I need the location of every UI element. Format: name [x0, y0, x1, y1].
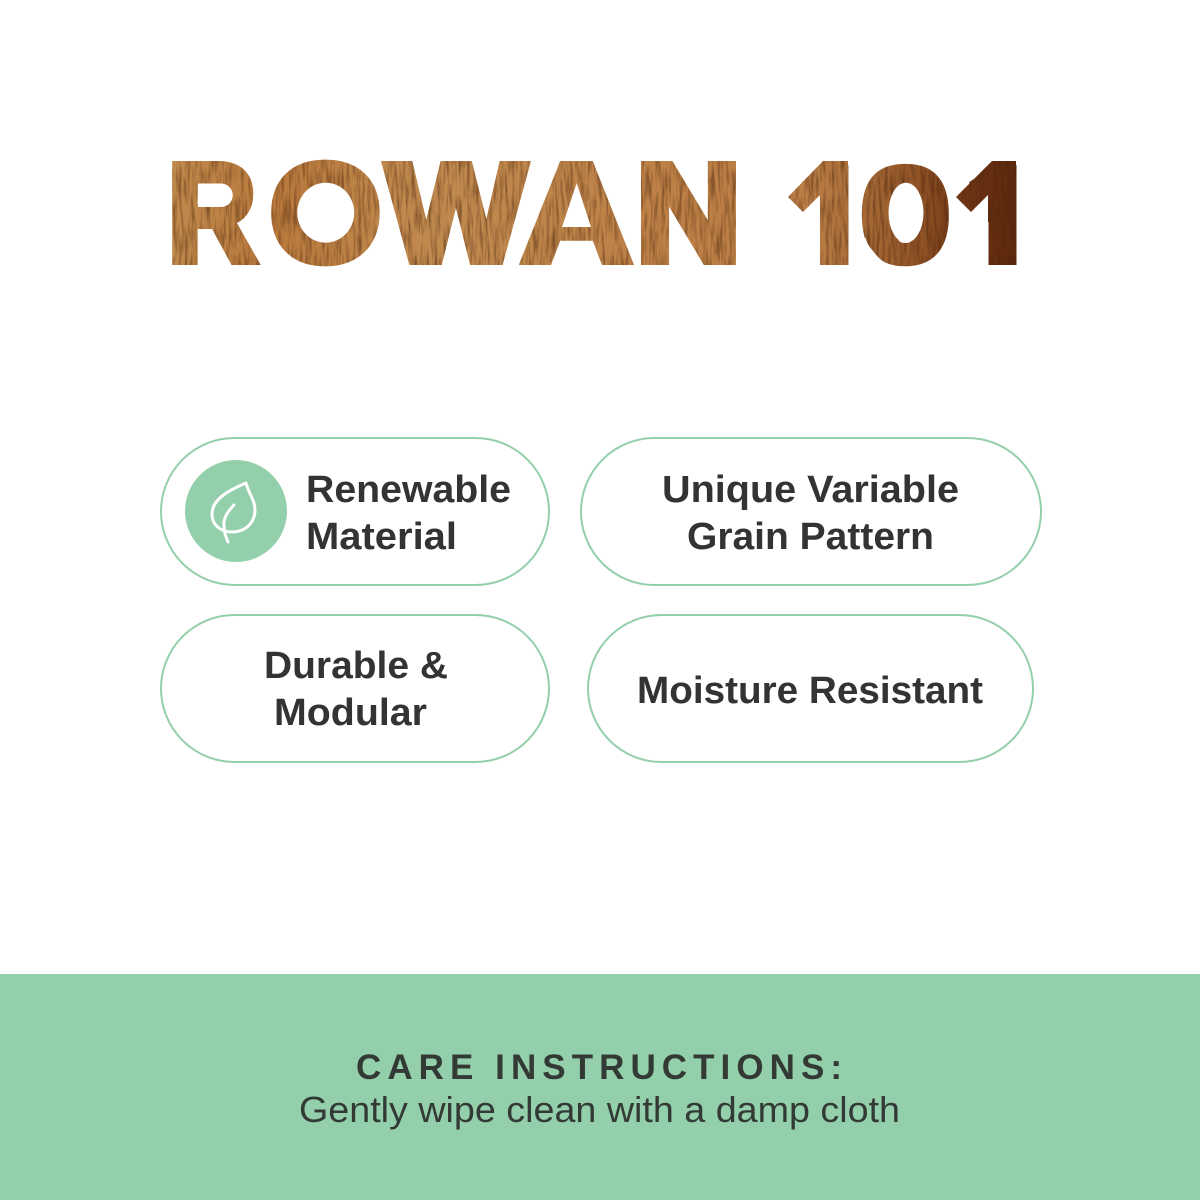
title: 1	[798, 142, 868, 288]
label: renewable material: Renewable	[306, 469, 511, 511]
pill: moisture resistant	[588, 615, 1033, 762]
title: W	[387, 136, 526, 290]
pill: unique variable grain pattern	[581, 438, 1041, 585]
pill: renewable material	[161, 438, 549, 585]
care instructions text: Gently wipe clean with a damp cloth	[299, 1089, 900, 1130]
footer band	[0, 974, 1200, 1200]
title: R	[168, 136, 256, 290]
label: renewable material: Material	[306, 516, 457, 558]
title	[168, 136, 1046, 290]
label: unique variable grain pattern: Grain Pattern	[687, 516, 934, 558]
title: O	[270, 136, 381, 290]
label: durable and modular: Durable &	[264, 645, 448, 687]
label: unique variable grain pattern: Unique Variable	[662, 469, 959, 511]
title: N	[636, 136, 741, 290]
title: 1	[965, 142, 1036, 288]
title: A	[522, 136, 631, 290]
care instructions heading: CARE INSTRUCTIONS:	[356, 1048, 842, 1087]
pill: durable and modular	[161, 615, 549, 762]
label: durable and modular: Modular	[274, 692, 427, 734]
label: moisture resistant: Moisture Resistant	[637, 670, 983, 712]
icon: leaf	[185, 460, 287, 562]
title: 0	[861, 142, 950, 288]
